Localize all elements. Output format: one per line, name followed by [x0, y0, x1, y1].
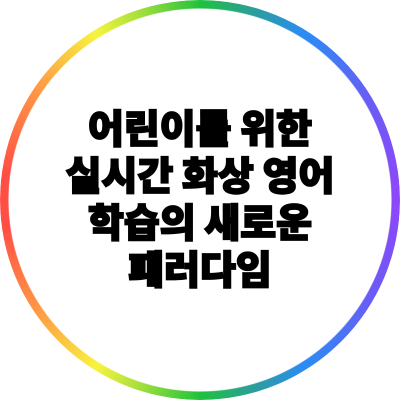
title line 2: 실시간 화상 영어 [66, 156, 334, 199]
title line 3: 학습의 새로운 [88, 203, 312, 246]
title line 1: 어린이를 위한 [88, 109, 312, 152]
title line 4: 패러다임 [128, 250, 272, 293]
